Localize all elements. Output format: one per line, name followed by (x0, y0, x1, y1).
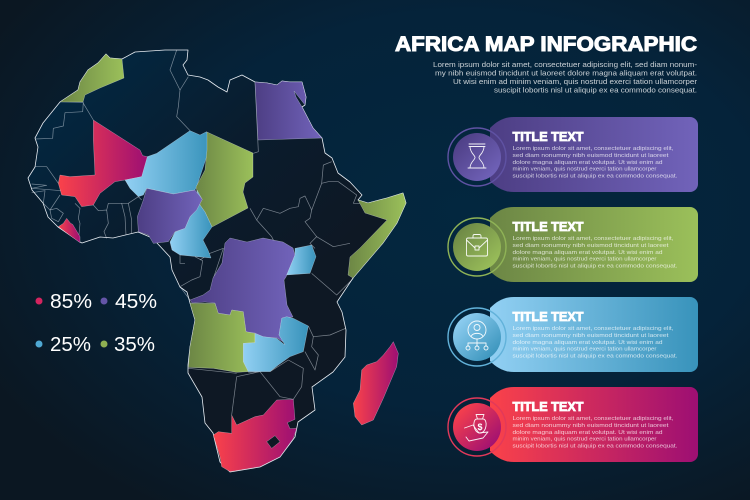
legend (36, 291, 157, 356)
country: Angola (188, 303, 255, 372)
card title: TITLE TEXT (512, 130, 584, 144)
country: Niger (125, 131, 210, 197)
card text: minim veniam, quis nostrud exerci tation ullamcorper (512, 256, 657, 262)
icon: hand holding money bag: $ (477, 422, 483, 432)
card text: sed diam nonummy nibh euismod tincidunt ut laoreet (512, 333, 669, 339)
card text: suscipit lobortis nisl ut aliquip ex ea commodo consequat. (512, 174, 678, 180)
card text: sed diam nonummy nibh euismod tincidunt ut laoreet (512, 243, 669, 249)
eastern and central borders (250, 82, 360, 248)
legend item: 35%: 35% (114, 334, 155, 356)
country: Nigeria (137, 188, 202, 243)
intro paragraph (433, 60, 698, 94)
card text (512, 146, 678, 180)
icon: hourglass (468, 144, 486, 168)
card text (512, 236, 678, 270)
country: South Africa (213, 399, 297, 472)
country: Sierra Leone (58, 218, 80, 243)
western and northern borders (32, 50, 190, 242)
map of Africa (28, 50, 406, 472)
intro paragraph: suscipit lobortis nisl ut aliquip ex ea commodo consequat. (494, 86, 697, 94)
card text: suscipit lobortis nisl ut aliquip ex ea commodo consequat. (512, 354, 678, 360)
legend item: 25%: 25% (50, 334, 91, 356)
card text: dolore magna aliquam erat volutpat. Ut wisi enim ad (512, 340, 662, 346)
country: Mali (58, 120, 147, 207)
card title: TITLE TEXT (512, 310, 584, 324)
country: Cameroon (170, 190, 212, 258)
icon: hand holding money bag (464, 414, 488, 441)
country: Zambia (243, 317, 308, 372)
card text: minim veniam, quis nostrud exerci tation ullamcorper (512, 166, 657, 172)
country: Egypt (255, 81, 322, 140)
card text: sed diam nonummy nibh euismod tincidunt ut laoreet (512, 153, 669, 159)
intro paragraph: Ut wisi enim ad minim veniam, quis nostrud exerci tation ullamcorper (453, 77, 698, 86)
card text (512, 416, 678, 450)
card: purple (448, 117, 698, 192)
card: blue (448, 297, 698, 372)
card text: Lorem ipsum dolor sit amet, consectetuer adipiscing elit, (512, 416, 674, 422)
card text (512, 326, 678, 360)
card text: dolore magna aliquam erat volutpat. Ut wisi enim ad (512, 430, 662, 436)
icon: people network (466, 321, 488, 350)
country: Chad (196, 132, 253, 227)
country: Madagascar (353, 342, 398, 425)
card text: suscipit lobortis nisl ut aliquip ex ea commodo consequat. (512, 444, 678, 450)
intro paragraph: Lorem ipsum dolor sit amet, consectetuer adipiscing elit, sed diam nonum- (433, 60, 698, 69)
card text: Lorem ipsum dolor sit amet, consectetuer adipiscing elit, (512, 326, 674, 332)
southern borders (180, 248, 353, 415)
card text: minim veniam, quis nostrud exerci tation ullamcorper (512, 346, 657, 352)
country: Somalia (348, 193, 406, 278)
card text: Lorem ipsum dolor sit amet, consectetuer adipiscing elit, (512, 146, 674, 152)
card text: sed diam nonummy nibh euismod tincidunt ut laoreet (512, 423, 669, 429)
card title: TITLE TEXT (512, 220, 584, 234)
card text: suscipit lobortis nisl ut aliquip ex ea commodo consequat. (512, 264, 678, 270)
legend item: 45%: 45% (115, 291, 157, 313)
card text: dolore magna aliquam erat volutpat. Ut wisi enim ad (512, 250, 662, 256)
title: AFRICA MAP INFOGRAPHIC (395, 33, 697, 56)
card text: minim veniam, quis nostrud exerci tation ullamcorper (512, 436, 657, 442)
continent base (28, 50, 406, 472)
card text: dolore magna aliquam erat volutpat. Ut wisi enim ad (512, 160, 662, 166)
icon: briefcase (466, 234, 488, 256)
card text: Lorem ipsum dolor sit amet, consectetuer adipiscing elit, (512, 236, 674, 242)
card title: TITLE TEXT (512, 400, 584, 414)
legend item: 85%: 85% (50, 291, 92, 313)
card: red (448, 387, 698, 462)
country: DR Congo (190, 238, 295, 343)
country: Morocco (60, 54, 124, 102)
intro paragraph: my nibh euismod tincidunt ut laoreet dolore magna aliquam erat volutpat. (435, 68, 697, 78)
country: Uganda/Rwanda block (287, 245, 316, 275)
card: green (448, 207, 698, 282)
